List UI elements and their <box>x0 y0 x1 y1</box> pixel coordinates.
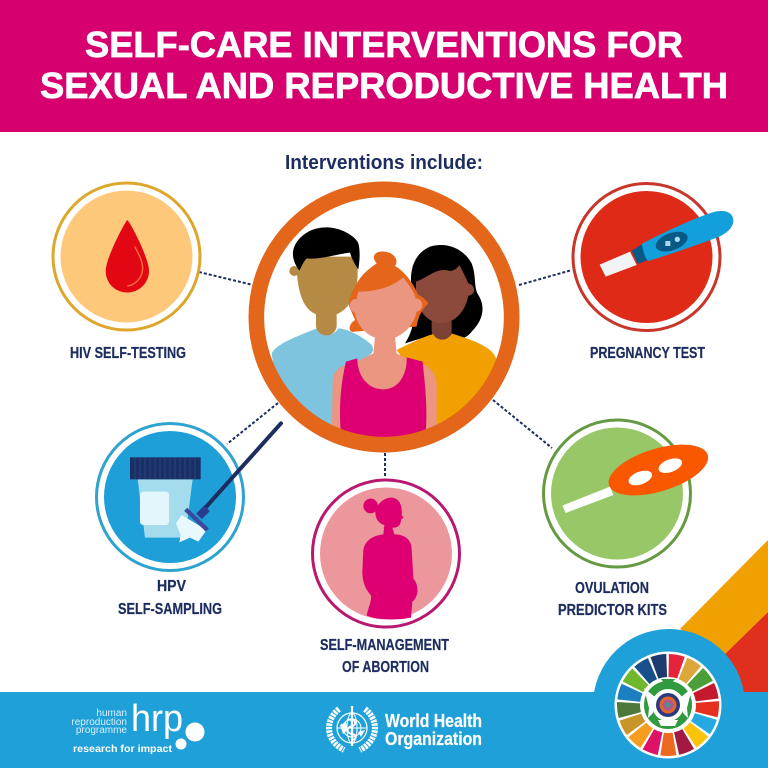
dotted connectors <box>199 270 572 478</box>
predictor stick <box>562 434 714 513</box>
right woman <box>397 245 498 440</box>
logo: HRP: research for impact <box>73 743 173 755</box>
label: HPV self-sampling <box>118 578 222 618</box>
pregnancy test stick <box>600 211 733 277</box>
logo: HRP: reproduction <box>71 717 127 728</box>
label: HPV self-sampling: HPV <box>157 578 186 595</box>
logo: HRP: hrp <box>131 698 183 740</box>
label: ovulation predictor kits <box>558 580 667 619</box>
WHO wordmark <box>385 711 482 749</box>
logo: World Health Organization <box>329 706 482 750</box>
WHO wordmark: World Health <box>385 711 482 731</box>
sample cup and swab <box>130 423 281 542</box>
label: ovulation predictor kits: PREDICTOR KITS <box>558 602 667 619</box>
front woman <box>332 252 437 440</box>
icon: pregnancy test <box>573 184 733 330</box>
title: SEXUAL AND REPRODUCTIVE HEALTH <box>40 65 728 106</box>
footer band <box>0 629 768 768</box>
icon: blood drop <box>106 220 149 292</box>
label: self-management of abortion: OF ABORTION <box>342 659 429 676</box>
title: SELF-CARE INTERVENTIONS FOR <box>85 24 683 65</box>
WHO emblem <box>329 706 375 750</box>
icon: ovulation predictor kit <box>544 420 714 567</box>
wheel centre emblem <box>644 679 692 726</box>
title <box>40 24 728 106</box>
icon: self-management of abortion <box>312 480 460 627</box>
logo: HRP: programme <box>76 725 127 736</box>
logo: HRP <box>71 698 204 755</box>
logo: HRP: human <box>96 708 127 719</box>
label: self-management of abortion: SELF-MANAGEMENT <box>320 637 449 654</box>
icon: HIV self-testing <box>53 183 200 330</box>
orange ring <box>256 189 512 445</box>
label: pregnancy test: PREGNANCY TEST <box>590 345 705 362</box>
SDG wheel <box>612 649 724 761</box>
label: ovulation predictor kits: OVULATION <box>575 580 649 597</box>
left man <box>272 227 373 440</box>
label: HPV self-sampling: SELF-SAMPLING <box>118 601 222 618</box>
subheading: Interventions include: <box>285 152 483 174</box>
decorative corner stripes <box>680 540 768 692</box>
woman silhouette <box>362 498 417 619</box>
label: HIV self-testing: HIV SELF-TESTING <box>70 345 186 362</box>
central circle: three people <box>256 189 512 445</box>
icon: HPV self-sampling <box>96 423 281 570</box>
header banner <box>0 0 768 132</box>
WHO wordmark: Organization <box>385 729 482 749</box>
label: self-management of abortion <box>320 637 449 676</box>
